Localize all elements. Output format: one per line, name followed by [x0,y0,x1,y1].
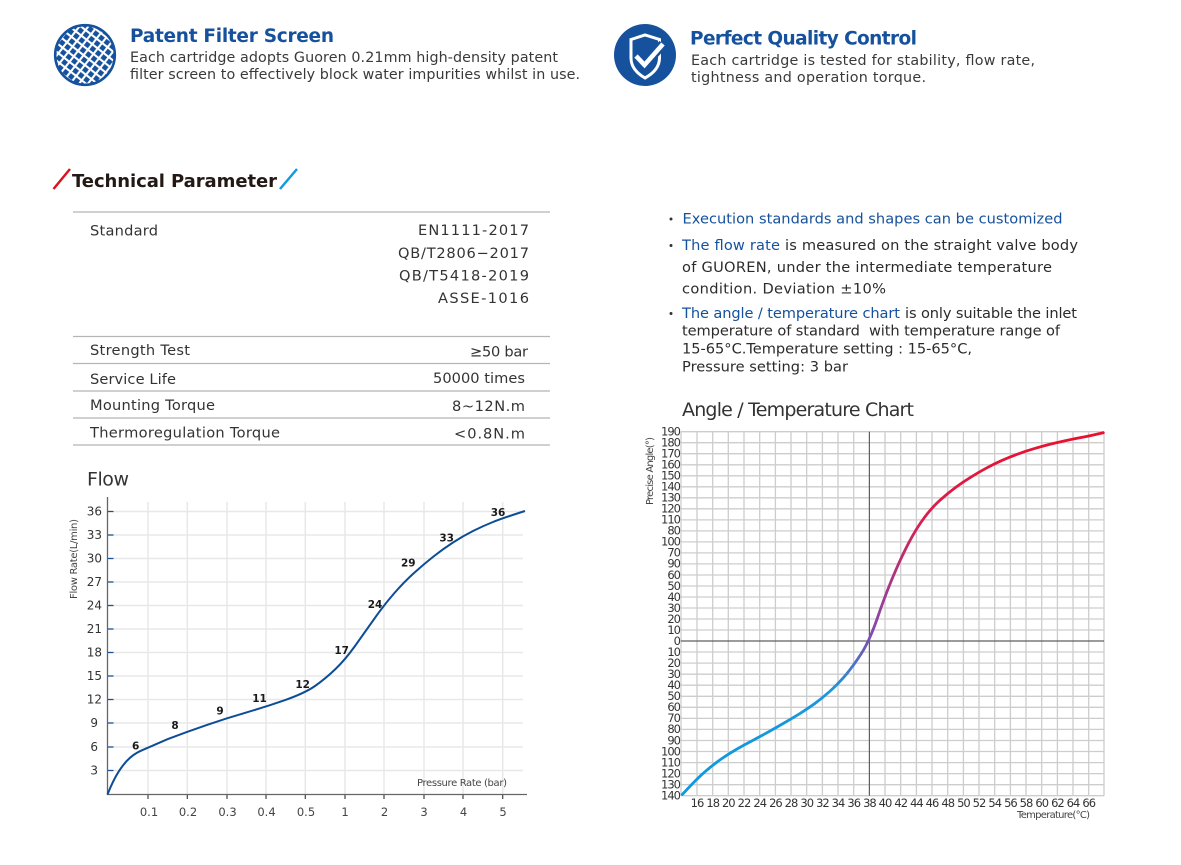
heading: flow: Flow [87,468,129,490]
section heading: technical parameter: Technical Parameter [72,171,277,192]
flow y axis title: Flow Rate(L/min) [69,519,80,599]
angle x axis labels: 60 [1035,796,1049,810]
angle y axis labels: 70 [667,546,681,560]
angle y axis labels: 70 [667,711,681,725]
note: flow rate [670,237,1078,298]
angle y axis labels [661,424,681,802]
note: flow rate: condition. Deviation ±10% [682,280,886,298]
flow data labels: 33 [439,532,454,544]
angle x axis labels: 16 [691,796,704,810]
angle x axis labels: 38 [863,796,876,810]
row: service life: 50000 times [433,370,525,387]
flow data labels: 12 [295,679,310,691]
angle x axis labels: 50 [957,796,970,810]
note: flow rate: is measured on the straight valve body [785,237,1078,254]
flow x axis labels: 0.2 [179,805,197,819]
angle x axis labels: 32 [816,796,829,810]
flow y axis labels: 27 [87,575,102,589]
note: flow rate: of GUOREN, under the intermediate temperature [682,259,1052,276]
angle y axis labels: 0 [674,634,681,648]
row: service life [90,370,525,388]
flow x axis labels: 0.1 [140,805,158,819]
row: strength test: ≥50 bar [470,344,528,360]
flow x axis labels: 1 [341,805,349,819]
angle y axis labels: 60 [667,700,681,714]
angle x axis labels: 34 [832,796,845,810]
angle y axis labels: 10 [667,645,681,659]
angle x axis labels: 40 [879,796,892,810]
flow x axis labels: 4 [460,805,467,819]
angle y axis labels: 150 [661,469,681,483]
angle x axis labels: 64 [1067,796,1080,810]
notes list [670,210,1078,376]
angle x axis labels: 44 [910,796,923,810]
angle x axis labels: 56 [1004,796,1017,810]
angle y axis labels: 110 [661,513,681,527]
flow y axis labels: 21 [87,622,102,636]
heading: perfect quality control: Perfect Quality Control [690,28,917,50]
row: standard: EN1111-2017 [418,222,529,239]
text: patent filter description: filter screen to effectively block water impurities whilst in use. [130,67,580,83]
row: mounting torque [90,397,525,415]
flow y axis labels: 30 [87,552,102,566]
angle curve line [682,433,1103,794]
text: quality control description: tightness and operation torque. [691,70,926,86]
flow data labels: 29 [401,558,416,570]
angle y axis labels: 30 [667,601,681,615]
angle y axis labels: 40 [667,590,681,604]
flow y axis labels: 12 [87,692,102,706]
flow y axis labels: 18 [87,646,102,660]
angle y axis labels: 30 [667,667,681,681]
angle y axis labels: 180 [661,436,681,450]
angle x axis labels: 46 [926,796,939,810]
angle y axis labels: 50 [667,689,681,703]
note: angle temperature chart: Pressure setting: 3 bar [682,358,848,376]
angle x axis labels: 24 [753,796,767,810]
angle x axis labels: 42 [894,796,908,810]
note: customization: Execution standards and shapes can be customized [682,210,1062,228]
row: standard: ASSE-1016 [438,290,529,307]
heading: patent filter screen: Patent Filter Screen [130,26,334,47]
angle x axis title: Temperature(°C) [1016,810,1090,821]
flow x axis labels: 0.5 [297,805,315,819]
angle x axis labels: 30 [800,796,814,810]
angle y axis labels: 20 [667,612,681,626]
angle y axis labels: 10 [667,623,681,637]
row: service life: Service Life [90,371,176,388]
angle y axis labels: 160 [661,458,681,472]
flow y axis labels: 36 [87,504,102,518]
note: angle temperature chart: temperature of standard with temperature range of [682,322,1061,340]
angle y axis labels: 80 [667,524,681,538]
flow x axis labels: 0.3 [218,805,237,819]
angle x axis labels: 20 [722,796,735,810]
angle x axis labels: 36 [847,796,861,810]
angle x axis labels: 52 [973,796,986,810]
chart: angle temperature [645,424,1104,821]
angle x axis labels: 66 [1082,796,1096,810]
angle y axis labels: 140 [661,480,681,494]
row: thermoregulation torque: Thermoregulation Torque [89,424,280,442]
row: strength test [90,342,528,360]
note: angle temperature chart [670,305,1077,376]
flow x axis labels: 5 [499,805,507,819]
feature: patent filter screen [55,25,580,85]
flow x axis labels: 3 [420,805,428,819]
flow x axis labels: 2 [381,805,388,819]
angle y axis labels: 80 [667,722,681,736]
angle y axis labels: 140 [661,788,681,802]
feature: perfect quality control [614,24,1035,86]
note: angle temperature chart: 15-65°C.Temperature setting : 15-65°C, [682,340,972,358]
angle x axis labels: 48 [941,796,955,810]
icon: shield with check [614,24,676,86]
flow data labels: 36 [491,507,505,519]
text: quality control description [691,53,1035,86]
flow y axis labels [87,504,102,778]
angle y axis labels: 110 [661,755,681,769]
row: thermoregulation torque [89,424,525,442]
flow y axis labels: 3 [90,764,98,778]
flow data labels: 6 [132,740,139,752]
flow y axis labels: 24 [87,598,102,612]
angle y axis labels: 170 [661,446,681,460]
flow y axis labels: 6 [90,740,98,754]
row: standard: QB/T2806−2017 [398,245,529,262]
note: flow rate: The flow rate [681,237,780,254]
note: angle temperature chart: The angle / temperature chart [681,305,900,322]
flow data labels: 9 [216,706,224,718]
angle y axis labels: 100 [661,535,681,549]
flow x axis title: Pressure Rate (bar) [417,778,507,789]
flow data labels: 8 [171,720,179,732]
angle x axis labels: 26 [769,796,782,810]
text: patent filter description [130,50,580,83]
angle y axis labels: 50 [667,579,681,593]
angle y axis labels: 90 [667,733,681,747]
angle x axis labels: 54 [988,796,1002,810]
flow data labels: 17 [334,645,349,657]
angle y axis labels: 100 [661,744,681,758]
row: standard: Standard [90,222,158,240]
icon: filter mesh [55,25,115,85]
heading: angle temperature chart: Angle / Temperature Chart [682,399,914,421]
flow x axis labels [140,805,507,819]
angle y axis labels: 130 [661,491,681,505]
row: mounting torque: Mounting Torque [90,397,215,414]
text: quality control description: Each cartridge is tested for stability, flow rate, [691,53,1035,69]
flow y axis labels: 15 [87,669,102,683]
flow curve line [108,511,525,794]
flow y axis labels: 9 [90,716,98,730]
angle y axis labels: 190 [661,424,681,438]
flow data labels: 11 [252,693,267,705]
angle y axis labels: 40 [667,678,681,692]
angle x axis labels: 22 [738,796,751,810]
angle y axis labels: 130 [661,778,681,792]
angle y axis labels: 90 [667,557,681,571]
row: thermoregulation torque: <0.8N.m [454,426,525,442]
row: standard [90,222,529,307]
angle x axis labels: 28 [785,796,798,810]
flow y axis labels: 33 [87,528,102,542]
row: mounting torque: 8~12N.m [452,398,525,415]
text: patent filter description: Each cartridge adopts Guoren 0.21mm high-density patent [130,50,558,66]
flow data labels [132,507,505,752]
chart: flow curve [69,497,527,819]
angle y axis labels: 20 [667,656,681,670]
angle y axis labels: 120 [661,766,681,780]
angle x axis labels: 18 [706,796,720,810]
flow x axis labels: 0.4 [257,805,276,819]
table: technical parameters [73,212,550,445]
row: strength test: Strength Test [90,342,190,359]
angle x axis labels: 58 [1020,796,1033,810]
flow data labels: 24 [368,599,382,611]
note: angle temperature chart: is only suitable the inlet [905,305,1077,322]
angle x axis labels: 62 [1051,796,1064,810]
angle y axis title: Precise Angle(°) [645,437,656,505]
angle x axis labels [691,796,1096,810]
angle y axis labels: 60 [667,568,681,582]
angle y axis labels: 120 [661,502,681,516]
row: standard: QB/T5418-2019 [399,268,529,284]
